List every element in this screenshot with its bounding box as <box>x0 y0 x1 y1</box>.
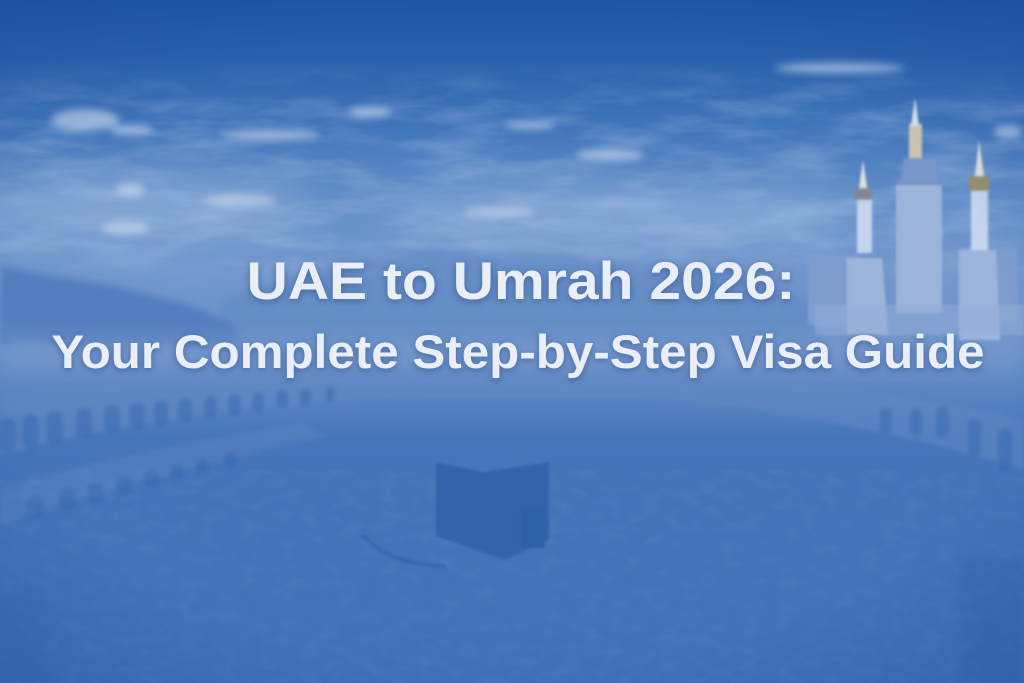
clock tower and minarets <box>808 98 1024 340</box>
title line 1: UAE to Umrah 2026: <box>247 252 795 311</box>
kaaba <box>363 452 549 566</box>
mosque arcades <box>0 375 1024 525</box>
title line 2: Your Complete Step-by-Step Visa Guide <box>51 325 985 378</box>
clouds <box>0 63 1022 245</box>
cloud texture <box>0 71 1024 272</box>
haze band <box>0 335 1024 370</box>
mountains <box>0 248 820 345</box>
